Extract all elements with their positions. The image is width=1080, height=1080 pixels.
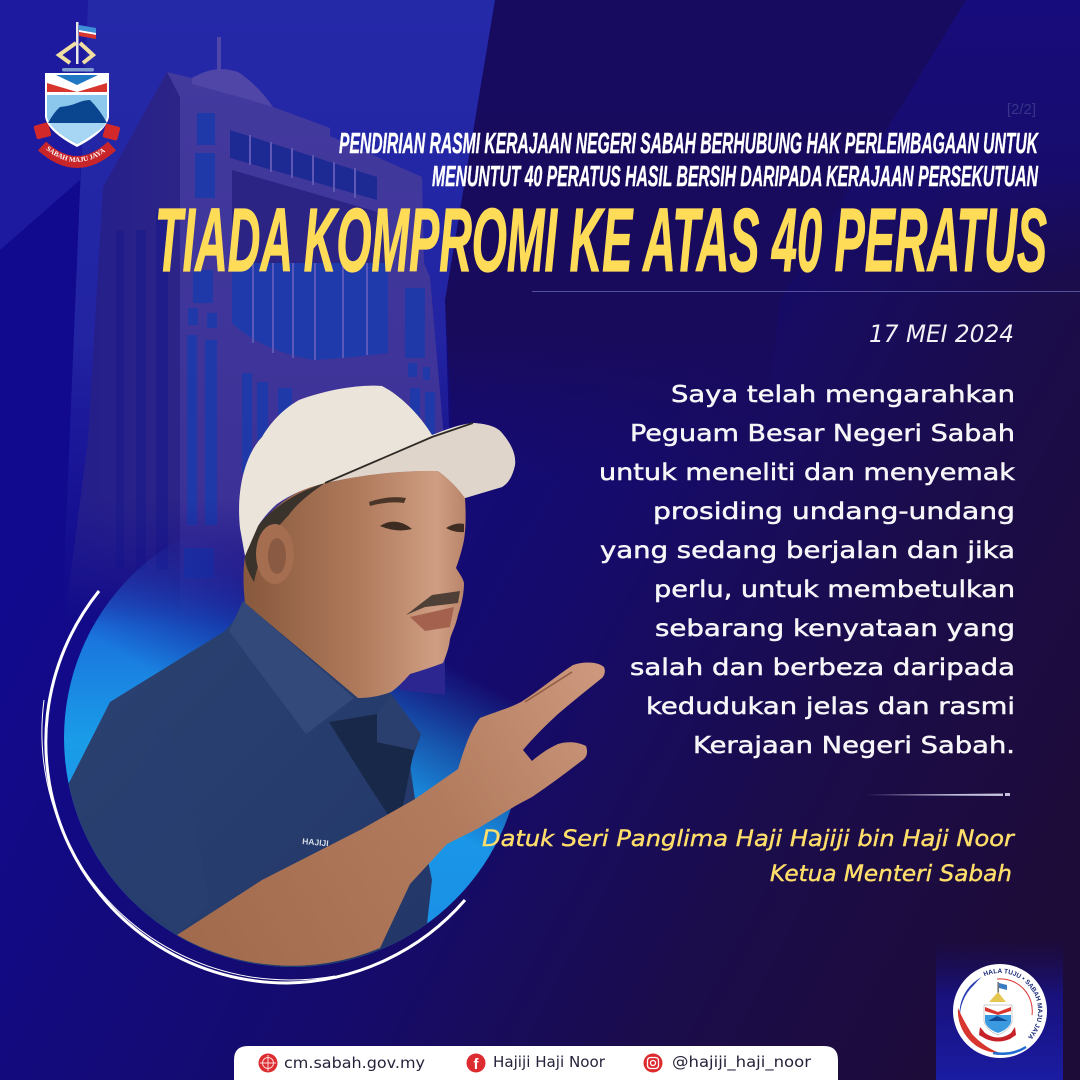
ribbon xyxy=(34,122,120,168)
name tag: HAJIJI xyxy=(302,836,329,848)
curved glass xyxy=(232,263,388,360)
cap xyxy=(239,386,515,556)
left face xyxy=(72,72,180,608)
lower right wing xyxy=(400,655,445,695)
attribution: Datuk Seri Panglima Haji Hajiji bin Haji Noor xyxy=(482,827,1016,852)
collar xyxy=(229,601,354,734)
quote text: Kerajaan Negeri Sabah. xyxy=(693,733,1015,759)
attribution xyxy=(482,827,1016,887)
shirt xyxy=(68,608,432,967)
building xyxy=(62,37,448,695)
quote text: Peguam Besar Negeri Sabah xyxy=(630,421,1015,447)
cap brim xyxy=(325,423,515,498)
footer bar xyxy=(234,1046,838,1080)
white swoosh arcs xyxy=(42,591,465,983)
round badge xyxy=(953,964,1047,1058)
quote text: Saya telah mengarahkan xyxy=(671,382,1015,408)
attribution: Ketua Menteri Sabah xyxy=(770,862,1012,887)
hair xyxy=(245,483,325,582)
portrait xyxy=(68,386,605,967)
badge lettering: HALA TUJU • SABAH MAJU JAYA xyxy=(983,968,1042,1039)
logo: Sabah crest xyxy=(34,22,120,168)
face and neck xyxy=(244,471,466,698)
quote text: untuk meneliti dan menyemak xyxy=(599,460,1016,486)
date: 17 MEI 2024 xyxy=(869,320,1014,348)
blue disc xyxy=(64,554,511,967)
signature divider xyxy=(865,793,1010,796)
finger gap xyxy=(525,672,572,702)
front face xyxy=(167,72,448,640)
facebook text: Hajiji Haji Noor xyxy=(493,1053,606,1071)
recess xyxy=(232,170,388,270)
dark placket xyxy=(329,714,414,830)
mouth xyxy=(410,607,454,631)
quote text: perlu, untuk membetulkan xyxy=(654,577,1015,603)
divider under title xyxy=(532,291,1080,292)
icon: website xyxy=(258,1054,278,1072)
website text: cm.sabah.gov.my xyxy=(284,1054,425,1072)
window band xyxy=(230,130,377,200)
page indicator: [2/2] xyxy=(1007,101,1036,118)
quote text: sebarang kenyataan yang xyxy=(655,616,1015,642)
small crest xyxy=(998,982,999,998)
eye xyxy=(380,522,412,530)
quote text xyxy=(599,382,1016,759)
tower windows xyxy=(184,113,435,578)
ribbon: SABAH MAJU JAYA xyxy=(46,146,106,162)
icon: facebook: f xyxy=(474,1056,480,1073)
dome and spire xyxy=(192,69,273,107)
icon: instagram xyxy=(644,1054,662,1072)
quote text: kedudukan jelas dan rasmi xyxy=(646,694,1015,720)
shield xyxy=(45,73,109,147)
icon: facebook xyxy=(466,1054,486,1073)
instagram text: @hajiji_haji_noor xyxy=(672,1053,812,1072)
subheading xyxy=(339,128,1039,193)
forearm and hand xyxy=(177,663,605,966)
quote text: salah dan berbeza daripada xyxy=(630,655,1015,681)
quote text: prosiding undang-undang xyxy=(653,499,1015,525)
quote text: yang sedang berjalan dan jika xyxy=(600,538,1015,564)
moustache xyxy=(406,591,460,615)
eyebrow xyxy=(369,497,406,506)
ear xyxy=(256,524,294,584)
flag and arms xyxy=(59,22,96,72)
